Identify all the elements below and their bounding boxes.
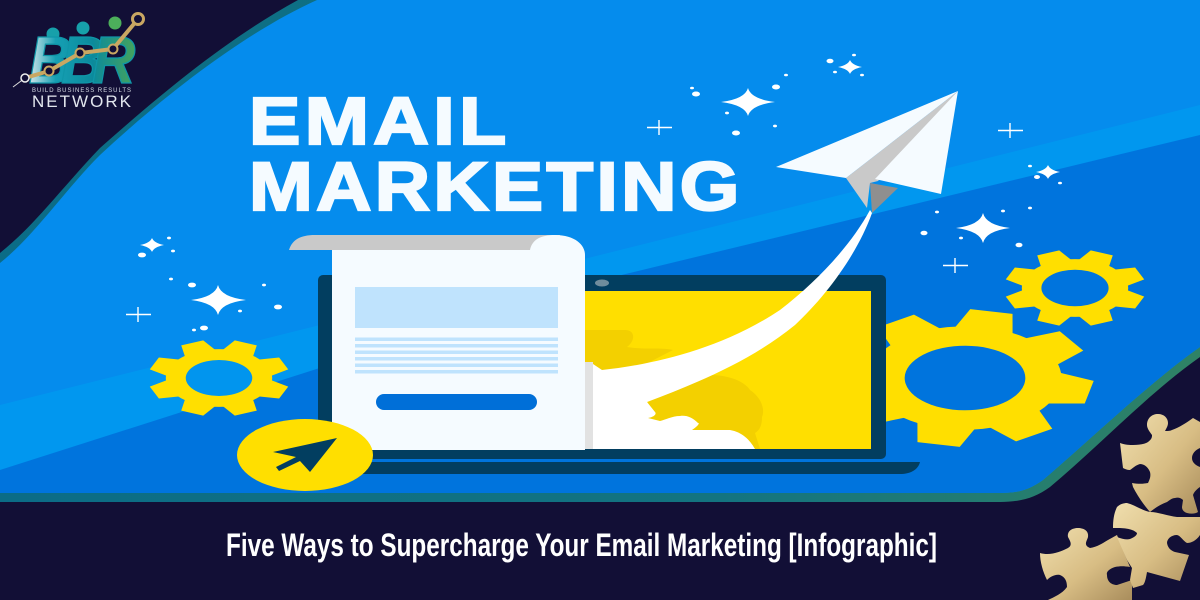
plus signs	[126, 120, 1023, 322]
laptop screen	[580, 291, 871, 449]
logo growth line	[13, 14, 144, 87]
top right gear	[984, 238, 1166, 338]
paper plane	[776, 91, 958, 213]
sparkles	[138, 54, 1062, 331]
logo network: NETWORK	[32, 92, 132, 111]
logo tagline: BUILD BUSINESS RESULTS	[32, 88, 131, 94]
webcam	[595, 280, 609, 286]
logo	[13, 14, 144, 111]
puzzle pieces	[1040, 414, 1200, 600]
paper sheet	[332, 235, 585, 450]
left gear	[128, 328, 310, 428]
subtitle: Five Ways to Supercharge Your Email Marketing [Infographic]	[226, 527, 937, 563]
button	[376, 394, 537, 410]
heading	[249, 85, 743, 225]
email paper	[289, 235, 585, 450]
logo letters: BBR	[29, 23, 135, 98]
laptop	[318, 210, 920, 474]
text lines	[355, 338, 558, 374]
large gear	[814, 297, 1116, 459]
cloud shadow upper	[584, 330, 673, 372]
paper fold shadow	[585, 362, 593, 449]
rocket trail and clouds	[590, 210, 872, 449]
banner	[355, 287, 558, 328]
cloud shadow lower	[648, 375, 763, 449]
puzzle piece top	[1120, 414, 1200, 514]
heading: EMAIL	[249, 85, 511, 159]
logo people	[46, 16, 122, 40]
heading: MARKETING	[249, 148, 743, 225]
puzzle piece middle	[1113, 503, 1200, 588]
laptop base	[340, 462, 920, 474]
paper curl	[289, 235, 560, 250]
laptop frame	[318, 275, 886, 459]
cursor badge	[237, 419, 373, 491]
puzzle piece bottom	[1040, 528, 1132, 600]
